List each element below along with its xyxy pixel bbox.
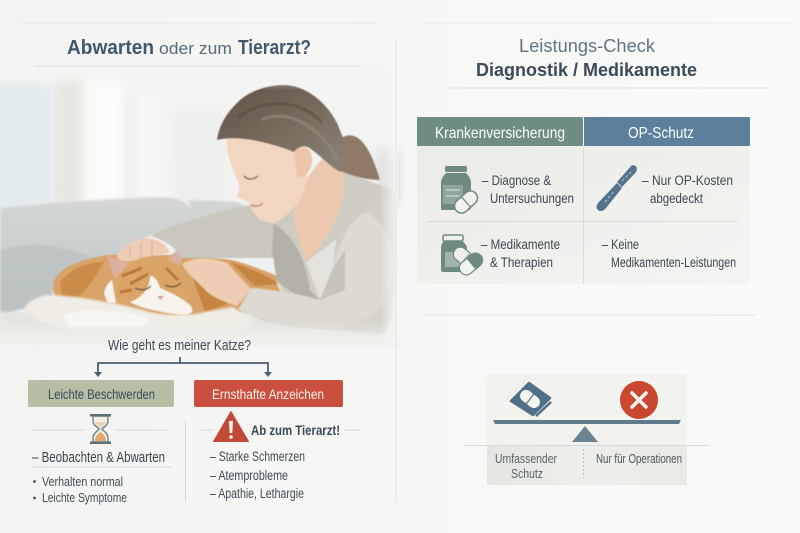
- title: Abwarten oder zum Tierarzt?: [20, 23, 378, 66]
- label: Umfassender Schutz: Schutz: [511, 467, 543, 481]
- text: Nur OP-Kosten abgedeckt: abgedeckt: [650, 191, 703, 206]
- cat body: [53, 255, 311, 316]
- question and branching arrows: Wie geht es meiner Katze?: [108, 337, 251, 354]
- header: Krankenversicherung: [417, 117, 583, 146]
- title: Abwarten oder zum Tierarzt?: oder zum: [159, 39, 232, 58]
- heading: Leichte Beschwerden: Leichte Beschwerden: [48, 386, 155, 402]
- text: Beobachten und Abwarten: – Beobachten & Abwarten: [32, 450, 165, 466]
- text: Ab zum Tierarzt!: Ab zum Tierarzt!: [251, 422, 340, 438]
- petting arm sleeve: [150, 205, 290, 258]
- list: mild symptoms: Leichte Symptome: [42, 490, 127, 505]
- inner shirt: [306, 240, 336, 298]
- text: Diagnose und Untersuchungen: Untersuchungen: [490, 191, 574, 206]
- icon: red cross circle: [620, 381, 658, 419]
- label: Umfassender Schutz: [495, 452, 557, 481]
- icon: hourglass: [32, 414, 169, 444]
- heading: Leichte Beschwerden: [28, 380, 174, 407]
- title: Leistungs-Check Diagnostik / Medikamente: Leistungs-Check: [519, 36, 656, 56]
- title: Abwarten oder zum Tierarzt?: Tierarzt?: [238, 37, 311, 59]
- icon: insurance card with capsule: [511, 383, 551, 416]
- photo edge fades: [0, 66, 396, 90]
- header: OP-Schutz: [584, 117, 750, 146]
- icon: scalpel: [596, 165, 637, 211]
- text: Keine Medikamenten-Leistungen: [602, 237, 736, 270]
- list: mild symptoms: Verhalten normal: [42, 474, 123, 489]
- photo: woman petting sleeping cat on sofa: [0, 66, 400, 351]
- label: Umfassender Schutz: Umfassender: [495, 452, 557, 466]
- heading: Ernsthafte Anzeichen: [194, 380, 343, 407]
- heading: Ernsthafte Anzeichen: Ernsthafte Anzeichen: [212, 386, 324, 402]
- curtains in the background: [0, 78, 400, 210]
- balance scale comparison: [465, 374, 710, 485]
- title: Leistungs-Check Diagnostik / Medikamente: Diagnostik / Medikamente: [476, 59, 697, 80]
- text: Diagnose und Untersuchungen: [482, 173, 574, 206]
- header: Krankenversicherung: Krankenversicherung: [435, 125, 565, 142]
- text: Keine Medikamenten-Leistungen: – Keine: [602, 237, 639, 252]
- neck and face: [227, 135, 344, 262]
- cardigan: [150, 168, 397, 334]
- text: Medikamente und Therapien: – Medikamente: [481, 237, 560, 252]
- cat head: [104, 245, 192, 315]
- scale beam and fulcrum: [493, 420, 681, 442]
- comparison table: [417, 117, 750, 284]
- sofa back cushions and seat: [0, 197, 396, 346]
- text: Nur OP-Kosten abgedeckt: – Nur OP-Kosten: [642, 173, 733, 188]
- text: Medikamente und Therapien: & Therapien: [490, 255, 553, 270]
- text: Keine Medikamenten-Leistungen: Medikamenten-Leistungen: [611, 255, 736, 270]
- list: serious symptoms: [210, 449, 305, 501]
- text: Nur OP-Kosten abgedeckt: [642, 173, 733, 206]
- list: serious symptoms: – Atemprobleme: [210, 468, 288, 483]
- icon: medicine bottle with capsules: [441, 235, 485, 278]
- panel: Leichte Beschwerden: [28, 380, 174, 505]
- text: Medikamente und Therapien: [481, 237, 560, 270]
- list: mild symptoms: [33, 474, 127, 505]
- header: OP-Schutz: OP-Schutz: [628, 125, 694, 142]
- question and branching arrows: [94, 337, 272, 377]
- title: Leistungs-Check Diagnostik / Medikamente: [420, 23, 790, 88]
- hands: [117, 238, 251, 306]
- text: Diagnose und Untersuchungen: – Diagnose &: [482, 173, 551, 188]
- icon: warning triangle: [200, 412, 248, 442]
- label: Nur fuer Operationen: Nur für Operationen: [596, 452, 682, 466]
- panel: Ernsthafte Anzeichen: [194, 380, 360, 501]
- front right sleeve: [238, 212, 392, 329]
- list: serious symptoms: – Starke Schmerzen: [210, 449, 305, 464]
- hair with bun: [217, 85, 380, 180]
- blanket: [25, 295, 255, 330]
- icon: pill bottle with capsule: [441, 166, 480, 216]
- title: Abwarten oder zum Tierarzt?: Abwarten: [67, 37, 154, 59]
- list: serious symptoms: – Apathie, Lethargie: [210, 486, 304, 501]
